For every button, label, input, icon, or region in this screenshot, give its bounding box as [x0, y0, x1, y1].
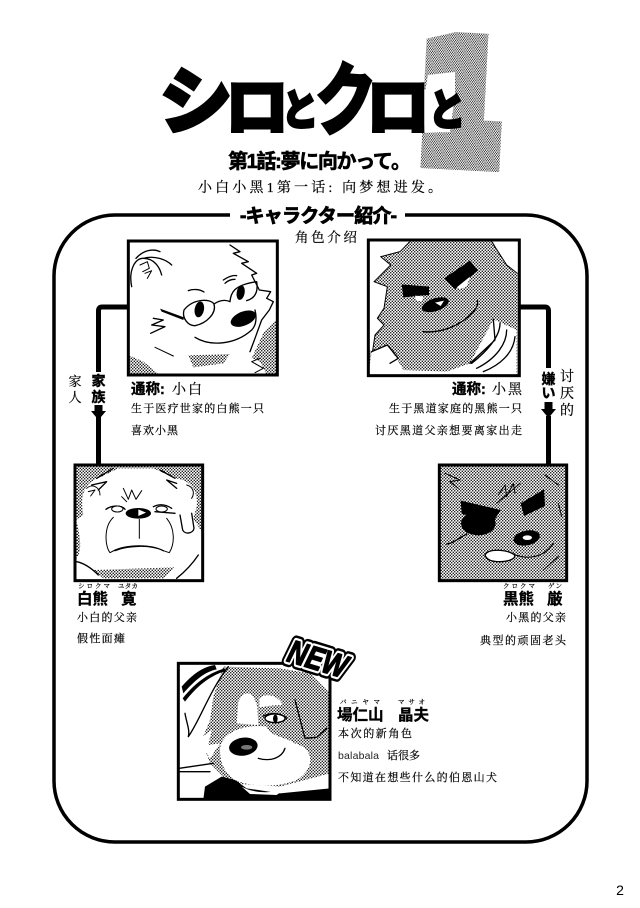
name: Kuro: 通称:: [452, 381, 486, 398]
description: Shiro: 喜欢小黑: [131, 423, 179, 437]
portrait: Shiro's father: [75, 465, 203, 581]
label: family vertical: 家: [92, 373, 106, 389]
name: Kurokuma Gen: クロクマ: [503, 582, 535, 590]
name: Shirokuma Yutaka: 白熊: [77, 589, 108, 608]
label: family translation: [68, 374, 82, 405]
name: Kurokuma Gen: 黒熊: [503, 589, 534, 608]
portrait: Bernese dog: [178, 663, 330, 799]
portrait: black bear Kuro: [368, 240, 519, 376]
label: family vertical: 族: [92, 389, 106, 405]
connector: family: [91, 307, 127, 466]
title logo: ロ: [225, 72, 289, 144]
name: Kurokuma Gen: [503, 582, 563, 608]
name: Kuro: [452, 381, 523, 398]
label: dislike vertical: [542, 371, 556, 401]
description: Baniyama: 话很多: [387, 749, 420, 762]
name: Kurokuma Gen: ゲン: [548, 582, 562, 590]
title logo: と: [282, 88, 318, 135]
portrait: Kuro's father: [439, 465, 567, 581]
description: Baniyama: 不知道在想些什么的伯恩山犬: [338, 770, 497, 784]
description: Shiro's father: [77, 610, 137, 645]
label: dislike translation: 的: [560, 403, 574, 419]
name: Shiro: [131, 381, 202, 398]
page number: 2: [616, 882, 624, 898]
label: family vertical: [92, 373, 106, 405]
name: Baniyama Masao: [337, 698, 430, 724]
label: dislike translation: [560, 369, 574, 419]
name: Baniyama Masao: 晶夫: [398, 705, 430, 724]
big halftone numeral 1: 1: [419, 18, 503, 191]
label: dislike vertical: い: [542, 385, 556, 401]
badge: NEW: NEW: [284, 633, 354, 686]
label: dislike translation: 厌: [560, 386, 574, 402]
label: family translation: 人: [68, 390, 82, 405]
name: Shirokuma Yutaka: ユタカ: [118, 581, 138, 590]
title logo: [160, 55, 465, 148]
subtitle japanese: 第1話:夢に向かって。: [228, 150, 411, 173]
description: Shiro's father: 假性面瘫: [77, 631, 125, 645]
title logo: シ: [160, 63, 232, 143]
subtitle chinese: 小白小黑1第一话: 向梦想进发。: [198, 179, 442, 196]
name: Kurokuma Gen: 厳: [547, 589, 563, 608]
description: Shiro: 生于医疗世家的白熊一只: [131, 401, 264, 415]
connector: dislike: [519, 307, 556, 466]
name: Shirokuma Yutaka: シロクマ: [78, 582, 110, 590]
title logo: ロ: [366, 72, 430, 144]
description: Kuro's father: 典型的顽固老头: [480, 633, 567, 647]
section heading translation: 角色介绍: [295, 230, 357, 245]
name: Shirokuma Yutaka: [77, 581, 138, 608]
badge: NEW: NEW: [284, 633, 354, 686]
name: Baniyama Masao: バニヤマ: [340, 698, 380, 706]
white notch behind last title character: [418, 72, 455, 133]
label: dislike translation: 讨: [560, 369, 574, 385]
label: dislike vertical: 嫌: [542, 371, 556, 387]
description: Baniyama: [338, 726, 497, 784]
description: Kuro's father: 小黑的父亲: [506, 610, 566, 624]
label: family translation: 家: [68, 374, 82, 389]
portrait: white bear Shiro: [128, 241, 277, 375]
badge: NEW: NEW: [284, 633, 354, 686]
name: Shirokuma Yutaka: 寛: [121, 589, 137, 608]
name: Kuro: 小黑: [492, 382, 523, 398]
description: Kuro: [375, 401, 522, 437]
description: Baniyama: balabala: [338, 750, 379, 762]
description: Kuro's father: [480, 610, 567, 647]
description: Kuro: 生于黑道家庭的黑熊一只: [389, 401, 522, 415]
description: Shiro's father: 小白的父亲: [77, 610, 137, 624]
title logo: ク: [312, 55, 378, 148]
name: Shiro: 通称:: [131, 381, 165, 398]
rounded frame: [54, 215, 587, 842]
description: Baniyama: 本次的新角色: [338, 726, 412, 740]
title logo: と: [429, 88, 465, 135]
name: Shiro: 小白: [172, 382, 202, 398]
description: Kuro: 讨厌黑道父亲想要离家出走: [375, 423, 522, 437]
description: Shiro: [131, 401, 264, 437]
section heading: -キャラクター紹介-: [240, 204, 397, 227]
name: Baniyama Masao: 場仁山: [337, 706, 384, 724]
name: Baniyama Masao: マサオ: [398, 698, 425, 706]
